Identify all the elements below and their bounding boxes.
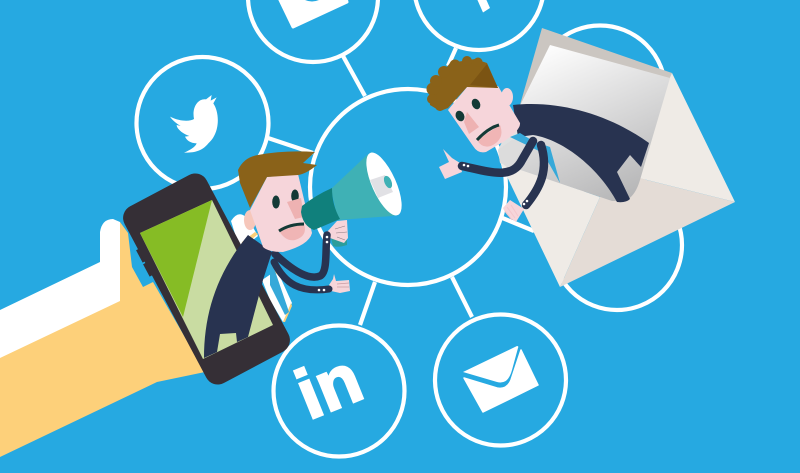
ear (501, 88, 513, 106)
bell centre (382, 175, 394, 189)
eyes (272, 196, 280, 208)
right flap (639, 73, 735, 202)
man in envelope: head (426, 56, 520, 152)
eyes (454, 109, 466, 123)
linkedin circle (274, 326, 404, 456)
lower arm (526, 145, 544, 205)
bell shading (370, 175, 393, 198)
man in phone: back shirt (231, 214, 292, 322)
hand holding phone (0, 219, 205, 457)
bottom flap (560, 178, 735, 287)
horn (331, 152, 398, 220)
email circle (435, 314, 566, 446)
icon: email envelope (463, 346, 538, 412)
connector lines (268, 48, 534, 325)
hair (238, 151, 317, 208)
ear (244, 210, 256, 230)
central hub circle (310, 89, 506, 285)
arm pointing (462, 141, 533, 173)
lower arm (274, 262, 329, 290)
face (448, 86, 520, 152)
mouth (477, 125, 501, 147)
screen (140, 200, 273, 359)
icon: twitter bird (170, 95, 218, 153)
phone buttons (132, 235, 154, 277)
upper hand (327, 220, 348, 243)
cuff buttons (463, 164, 528, 205)
hand pointing (439, 149, 462, 179)
envelope back (510, 28, 672, 200)
top mail circle (248, 0, 378, 62)
man in phone (204, 151, 350, 358)
envelope with man (439, 28, 735, 287)
mouth (279, 224, 305, 240)
lower hand (503, 200, 524, 222)
phone (118, 169, 295, 389)
left flap (500, 162, 600, 287)
cuff buttons (318, 236, 328, 291)
bell (359, 148, 409, 220)
lower hand (329, 274, 350, 293)
icon: cropped f at top right (477, 0, 490, 12)
screen highlight (140, 200, 212, 317)
sleeve (0, 219, 120, 359)
letter sheet (498, 45, 670, 201)
top right circle (414, 0, 544, 50)
face (250, 174, 312, 252)
mouthpiece (301, 188, 340, 230)
lower right circle (552, 180, 682, 310)
upper arm (275, 235, 327, 277)
tie (510, 133, 560, 183)
nose (464, 112, 479, 134)
arm and thumb (0, 222, 205, 457)
upper right circle (534, 26, 666, 156)
hair (426, 56, 498, 111)
nose (287, 198, 304, 219)
twitter circle (136, 57, 268, 189)
icon: linkedin text: in (285, 338, 372, 434)
megaphone (301, 148, 409, 230)
tie (270, 264, 289, 315)
suit body (204, 235, 272, 358)
network diagram (136, 0, 682, 456)
handle (331, 238, 347, 247)
man in envelope: suit (513, 104, 649, 202)
phone body (118, 169, 295, 389)
icon: cropped mail at top (279, 0, 347, 27)
shirt (498, 140, 526, 170)
